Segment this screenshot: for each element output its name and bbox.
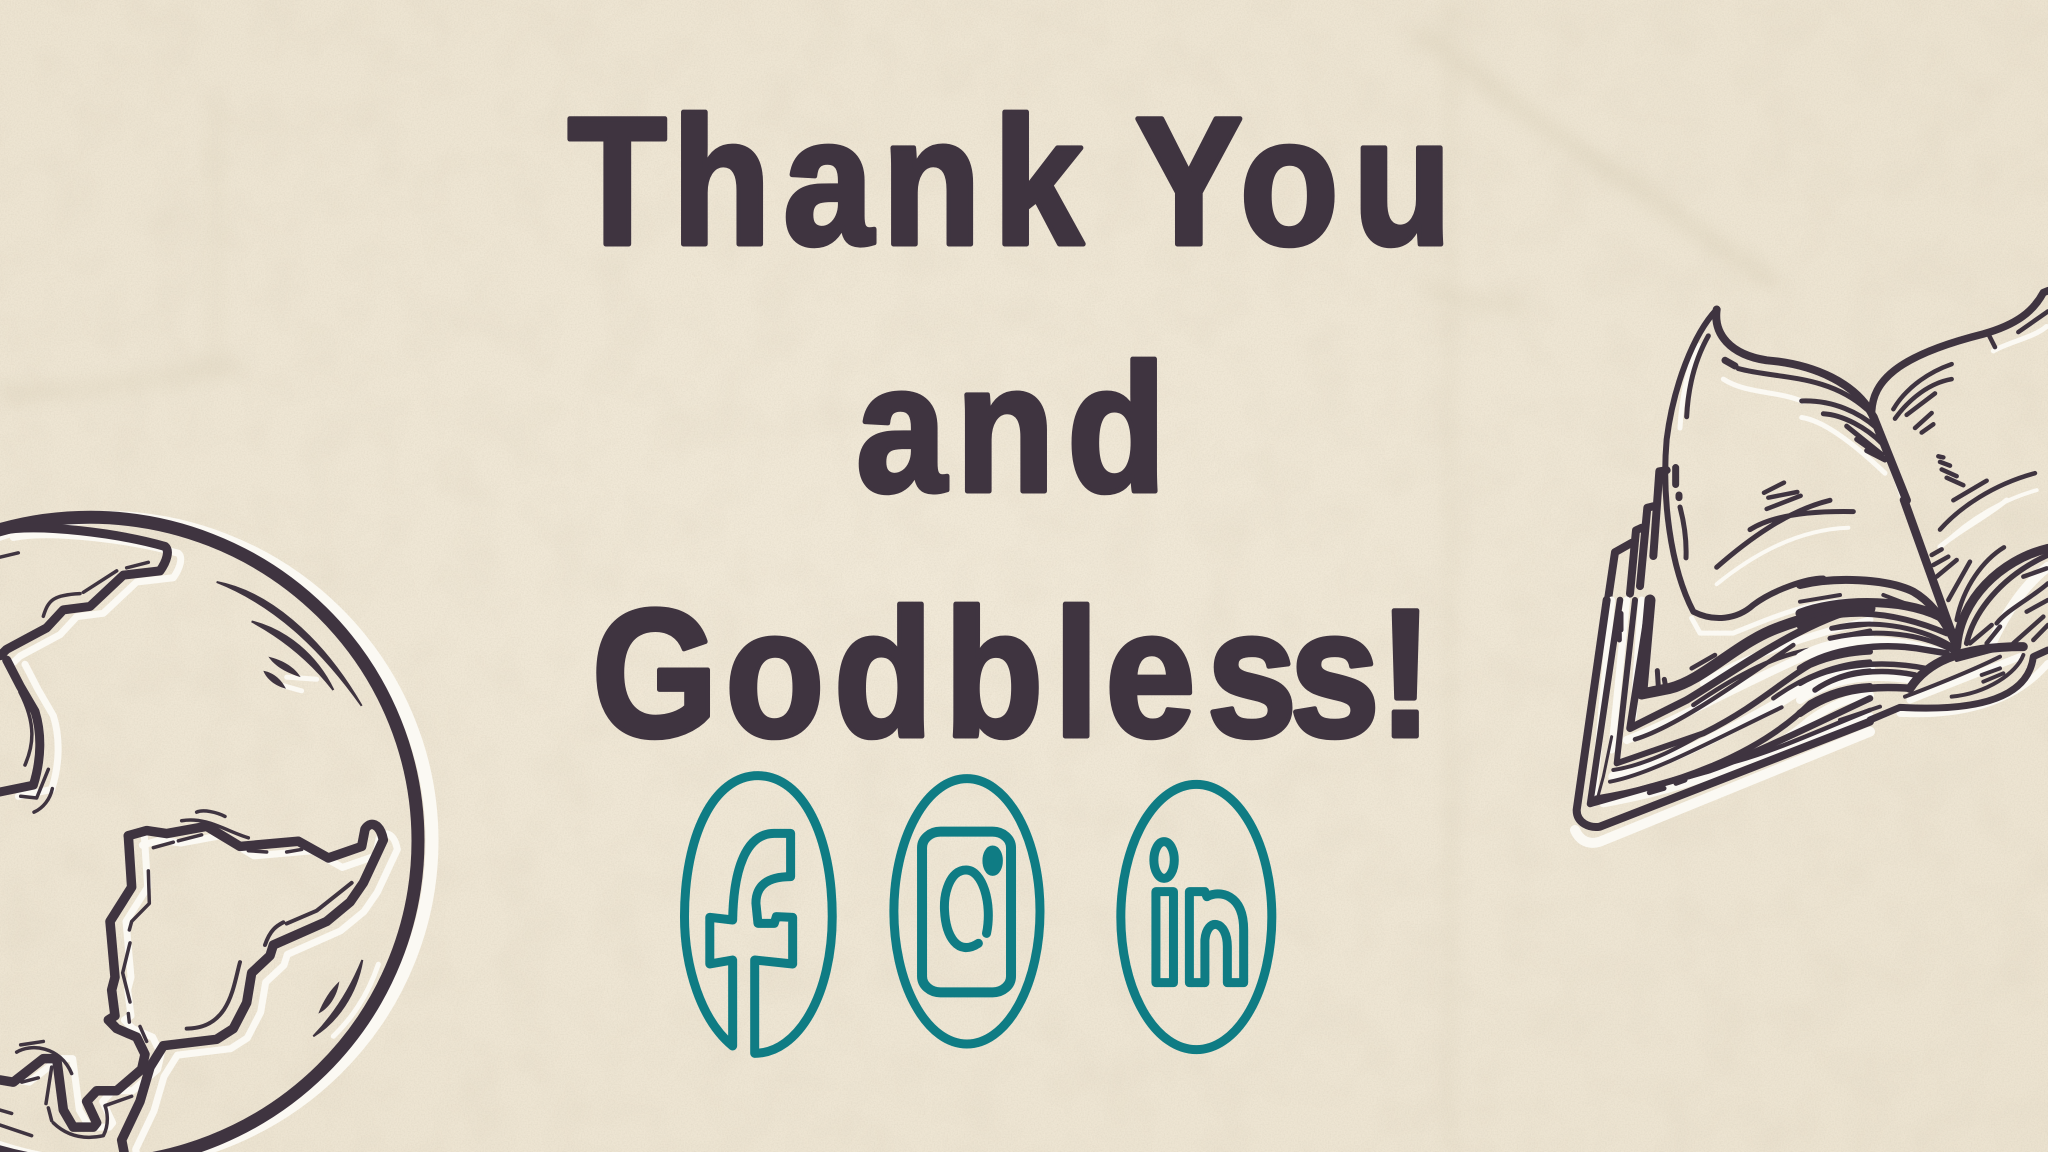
title: Thank You and Godbless!: Thank You — [568, 79, 1452, 283]
globe shading marks — [217, 582, 362, 1036]
icon: open book — [1575, 291, 2048, 843]
globe outline — [0, 517, 418, 1152]
spine — [1904, 500, 1957, 647]
title: Thank You and Godbless!: Godbless! — [592, 571, 1433, 775]
spine white fill — [1800, 500, 2048, 714]
page lines — [1597, 613, 1870, 798]
icon: instagram — [894, 779, 1040, 1044]
icon: facebook — [684, 776, 832, 1053]
lower left white fill — [1575, 600, 1870, 843]
upper spine segment — [1873, 417, 1907, 500]
globe white highlight — [0, 517, 432, 1152]
book base — [1870, 647, 2048, 720]
left page ends — [1800, 580, 1957, 720]
right fan — [1932, 547, 2048, 647]
book spine and right fan — [1800, 500, 2048, 720]
book upper pages — [1607, 291, 2048, 633]
right page — [1872, 291, 2048, 530]
cover steps upper — [1607, 470, 1667, 609]
continent north — [0, 528, 167, 812]
social icons row — [684, 776, 1272, 1053]
left page — [1665, 310, 1885, 618]
book lower left pages — [1575, 600, 1870, 843]
continent south — [0, 811, 383, 1152]
title: Thank You and Godbless! — [568, 79, 1452, 775]
cover outlines — [1577, 600, 1870, 827]
upper page white highlight — [1680, 326, 2047, 633]
icon: linkedin — [1121, 784, 1272, 1050]
icon: globe — [0, 517, 432, 1152]
title: Thank You and Godbless!: and — [856, 326, 1166, 530]
